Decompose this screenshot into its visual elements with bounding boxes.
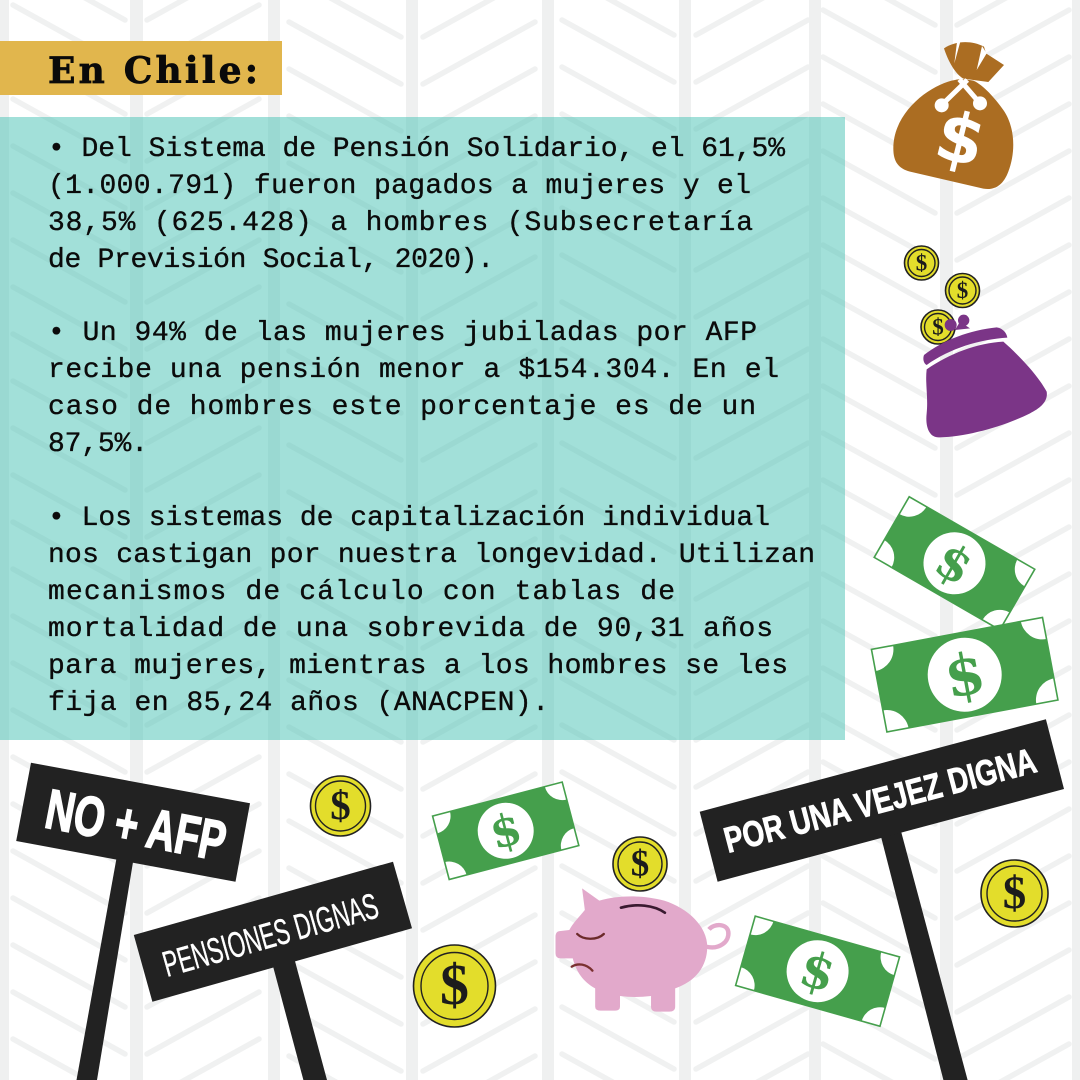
icon: coin right — [981, 860, 1048, 927]
icon: coin above piggy: $ — [631, 844, 649, 884]
icon: banknote lower right — [736, 916, 900, 1026]
icon: banknote centre — [433, 782, 579, 880]
icon: money bag — [893, 42, 1013, 189]
panel: teal text background — [0, 117, 845, 740]
text block: capitalización individual: • Los sistemas de capitalización individual — [48, 503, 770, 534]
icon: money bag: $ — [927, 96, 993, 184]
text block: pensión solidaria: • Del Sistema de Pensión Solidario, el 61,5% — [48, 134, 785, 165]
title: En Chile: En Chile: — [48, 50, 258, 92]
text block: pensión solidaria — [48, 134, 785, 276]
sign: Pensiones dignas — [134, 862, 412, 1080]
text block: jubiladas por AFP: 87,5%. — [48, 429, 148, 460]
icon: large coin: $ — [440, 952, 469, 1017]
icon: coin falling 2: $ — [957, 278, 968, 303]
text block: capitalización individual: mecanismos de cálculo con tablas de — [48, 577, 675, 608]
text block: capitalización individual: mortalidad de una sobrevida de 90,31 años — [48, 614, 773, 645]
text block: capitalización individual — [48, 503, 815, 719]
text block: jubiladas por AFP: recibe una pensión menor a $154.304. En el — [48, 355, 779, 386]
text block: capitalización individual: nos castigan por nuestra longevidad. Utilizan — [48, 540, 815, 571]
text block: jubiladas por AFP: • Un 94% de las mujeres jubiladas por AFP — [48, 318, 757, 349]
text block: pensión solidaria: (1.000.791) fueron pagados a mujeres y el — [48, 171, 751, 202]
text block: capitalización individual: para mujeres, mientras a los hombres se les — [48, 651, 788, 682]
icon: banknote lower right: $ — [793, 939, 842, 1004]
icon: coin above piggy — [613, 837, 667, 891]
icon: coin near signs: $ — [330, 782, 351, 828]
title: En Chile — [0, 41, 282, 95]
icon: banknote lower — [871, 617, 1058, 732]
icon: coin right: $ — [1003, 867, 1026, 919]
icon: banknote upper: $ — [926, 532, 982, 597]
icon: banknote centre: $ — [485, 803, 527, 860]
text block: pensión solidaria: 38,5% (625.428) a hombres (Subsecretaría — [48, 208, 753, 239]
icon: coin falling 3: $ — [932, 314, 944, 340]
icon: sad piggy bank — [556, 888, 728, 1012]
icon: purple purse — [923, 315, 1047, 437]
icon: coin falling 3 — [921, 310, 955, 344]
icon: coin near signs — [310, 776, 370, 836]
text block: jubiladas por AFP: caso de hombres este porcentaje es de un — [48, 392, 756, 423]
sign: Pensiones dignas: PENSIONES DIGNAS — [158, 885, 383, 985]
text block: pensión solidaria: de Previsión Social, 2020). — [48, 245, 494, 276]
icon: coin falling 2 — [946, 274, 980, 308]
text block: jubiladas por AFP — [48, 318, 779, 460]
text block: capitalización individual: fija en 85,24 años (ANACPEN). — [48, 688, 549, 719]
icon: coin falling 1: $ — [916, 250, 927, 276]
icon: banknote upper — [874, 497, 1035, 630]
sign: Por una vejez digna — [700, 719, 1064, 1080]
sign: No + AFP — [16, 763, 250, 1080]
sign: No + AFP: NO + AFP — [41, 777, 231, 873]
icon: large coin — [414, 945, 496, 1027]
icon: coin falling 1 — [904, 246, 938, 280]
icon: banknote lower: $ — [939, 639, 990, 712]
